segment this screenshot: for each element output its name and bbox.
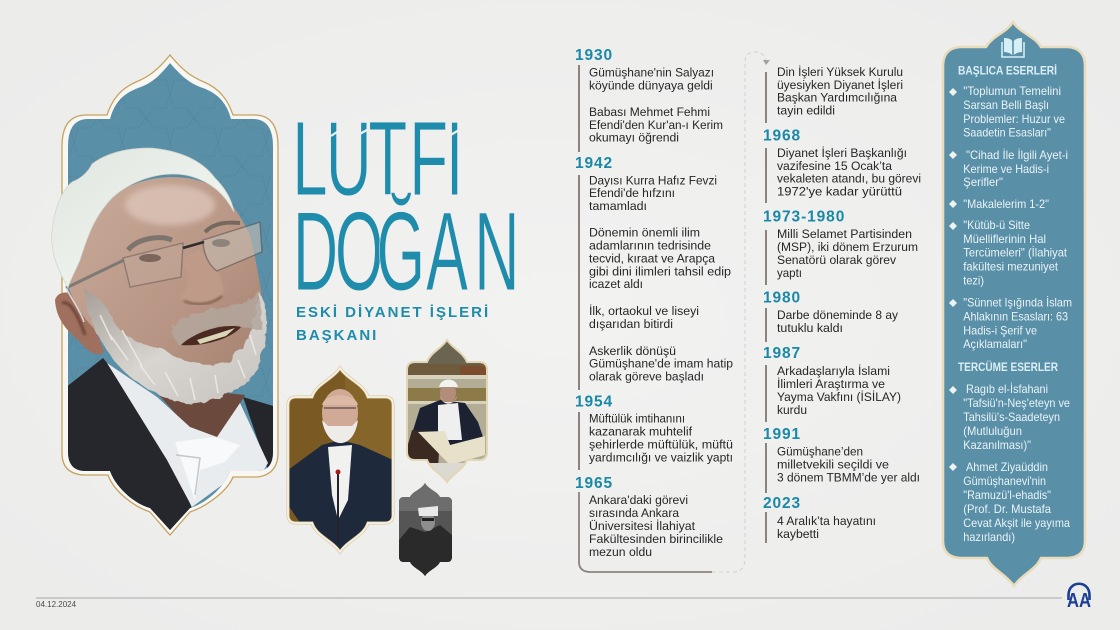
1987: 1987 — [763, 345, 801, 362]
1973-1980: Senatörü olarak görev — [777, 253, 897, 267]
1942: İlk, ortaokul ve liseyi — [589, 304, 699, 318]
footer rule — [36, 598, 1062, 599]
1930: Gümüşhane'nin Salyazı — [589, 66, 714, 80]
1991: milletvekili seçildi ve — [777, 458, 889, 472]
1965: sırasında Ankara — [589, 506, 679, 520]
1965 continued — [777, 65, 903, 118]
1965: Fakültesinden birincilikle — [589, 532, 723, 546]
subtitle: BAŞKANI — [296, 327, 378, 344]
list: main works: "Sünnet Işığında İslam — [963, 297, 1072, 310]
name line 1: LÜTFİ — [292, 99, 463, 218]
1942: Gümüşhane'de imam hatip — [589, 357, 733, 371]
1968: Diyanet İşleri Başkanlığı — [777, 146, 907, 160]
1980: tutuklu kaldı — [777, 321, 843, 335]
1954: 1954 — [575, 394, 613, 411]
mouth — [181, 326, 241, 345]
arrow head — [763, 60, 770, 65]
timeline: right column — [763, 65, 921, 543]
list: translations: Kazanılması)" — [963, 439, 1031, 452]
1965: 1965 — [575, 475, 613, 492]
1980: 1980 — [763, 290, 801, 307]
main portrait panel — [62, 55, 278, 535]
face — [68, 177, 265, 400]
1991 — [763, 426, 920, 485]
1942: Dayısı Kurra Hafız Fevzi — [589, 173, 717, 187]
1965 — [575, 475, 723, 559]
1973-1980: yaptı — [777, 266, 802, 280]
white cap — [52, 148, 234, 288]
list: main works: Problemler: Huzur ve — [963, 113, 1065, 126]
moustache — [170, 290, 263, 345]
name line 2: DOĞAN — [293, 190, 520, 315]
1954 — [575, 394, 733, 464]
2023: kaybetti — [777, 527, 819, 541]
subtitle — [296, 304, 490, 344]
list: main works: fakültesi mezuniyet — [963, 261, 1059, 274]
shirt — [107, 363, 268, 507]
1930: 1930 — [575, 47, 613, 64]
1965: mezun oldu — [589, 545, 652, 559]
beard — [84, 288, 267, 404]
bars — [578, 65, 580, 470]
1954: Müftülük imtihanını — [589, 412, 685, 426]
1942: Dönemin önemli ilim — [589, 226, 700, 240]
1968: 1968 — [763, 128, 801, 145]
portrait photo of Lütfi Doğan — [52, 148, 280, 535]
1987: Arkadaşlarıyla İslami — [777, 364, 890, 378]
2023 — [763, 495, 876, 541]
1965 continued: tayin edildi — [777, 104, 835, 118]
nose — [180, 250, 224, 303]
1942: Askerlik dönüşü — [589, 344, 676, 358]
1965 continued: Başkan Yardımcılığına — [777, 91, 897, 105]
1965: Üniversitesi İlahiyat — [589, 519, 696, 533]
1954: kazanarak muhtelif — [589, 425, 693, 439]
footer date: 04.12.2024 — [36, 600, 77, 609]
1987 — [763, 345, 901, 417]
1965 continued: üyesiyken Diyanet İşleri — [777, 78, 903, 92]
photo: reading among bookshelves — [405, 338, 490, 485]
1954: yardımcılığı ve vaizlik yaptı — [589, 450, 733, 464]
list: main works: Açıklamaları" — [963, 338, 1027, 351]
1942: tamamladı — [589, 199, 647, 213]
1942: tecvid, kıraat ve Arapça — [589, 252, 715, 266]
list: main works: Müelliflerinin Hal — [963, 233, 1046, 246]
list: translations: Gümüşhanevi'nin — [963, 475, 1046, 488]
1942: gibi dini ilimleri tahsil edip — [589, 264, 731, 278]
1973-1980: (MSP), iki dönem Erzurum — [777, 240, 918, 254]
1987: Yayma Vakfını (İSİLAY) — [777, 390, 901, 404]
forehead highlight — [125, 185, 215, 225]
ear — [55, 292, 104, 354]
1930: Babası Mehmet Fehmi — [589, 105, 710, 119]
1942: icazet aldı — [589, 277, 643, 291]
1968: vazifesine 15 Ocak’ta — [777, 159, 892, 173]
1930: okumayı öğrendi — [589, 131, 679, 145]
1965 continued: Din İşleri Yüksek Kurulu — [777, 65, 903, 79]
1968: vekaleten atandı, bu görevi — [777, 172, 921, 186]
list: main works: "Cihad İle İlgili Ayet-i — [966, 149, 1068, 162]
1991: Gümüşhane’den — [777, 445, 863, 459]
list: translations: hazırlandı) — [963, 531, 1015, 544]
1930: Efendi'den Kur'an-ı Kerim — [589, 118, 723, 132]
1987: kurdu — [777, 403, 807, 417]
arch pattern — [70, 79, 270, 530]
list: translations: "Tafsiü'n-Neş'eteyn ve — [963, 397, 1070, 410]
1980 — [763, 290, 899, 335]
list: main works: Hadis-i Şerif ve — [963, 325, 1037, 338]
heading: main works: BAŞLICA ESERLERİ — [958, 64, 1057, 78]
1991: 1991 — [763, 426, 801, 443]
title — [298, 122, 514, 290]
dashed continuation — [712, 52, 766, 572]
beard strokes — [100, 315, 256, 400]
1942 — [575, 155, 733, 384]
1942: dışarıdan bitirdi — [589, 317, 673, 331]
list: translations: "Ramuzü'l-ehadis" — [963, 489, 1051, 502]
photo: speaking at microphone — [285, 365, 397, 555]
1942: adamlarının tedrisinde — [589, 238, 711, 252]
1930: köyünde dünyaya geldi — [589, 78, 713, 92]
1973-1980 — [763, 209, 918, 280]
2023: 4 Aralık’ta hayatını — [777, 514, 876, 528]
glasses — [66, 222, 262, 322]
teal arch background — [68, 63, 273, 530]
1954: şehirlerde müftülük, müftü — [589, 438, 733, 452]
list: main works: "Toplumun Temelini — [963, 85, 1061, 98]
list: main works: "Makalelerim 1-2" — [963, 198, 1049, 211]
1942: Efendi'de hıfzını — [589, 186, 675, 200]
subtitle: ESKİ DİYANET İŞLERİ — [296, 304, 490, 321]
neck — [157, 393, 245, 437]
heading: translations: TERCÜME ESERLER — [958, 361, 1059, 374]
list: translations: Ragıb el-İsfahani — [966, 383, 1048, 396]
jacket — [60, 358, 280, 535]
connector line — [579, 492, 712, 572]
photo: archive black and white — [399, 483, 452, 576]
1987: İlimleri Araştırma ve — [777, 377, 885, 391]
list: translations: (Mutluluğun — [963, 425, 1022, 438]
panel shape — [943, 22, 1085, 586]
panel: works — [943, 22, 1085, 586]
list: main works: Saadetin Esasları" — [963, 127, 1051, 140]
bars — [765, 72, 767, 543]
2023: 2023 — [763, 495, 801, 512]
list: translations — [949, 383, 1071, 544]
list: main works: Şerifler" — [963, 176, 1003, 189]
1980: Darbe döneminde 8 ay — [777, 308, 899, 322]
list: main works: "Kütüb-ü Sitte — [963, 219, 1030, 232]
list: main works: Tercümeleri" (İlahiyat — [963, 247, 1068, 260]
logo: AA: AA — [1067, 590, 1091, 612]
list: main works — [949, 85, 1072, 351]
list: translations: Cevat Akşit ile yayıma — [963, 517, 1071, 530]
1930 — [575, 47, 723, 145]
cuts for integrated dots — [331, 130, 459, 136]
eyes and brows — [128, 223, 240, 262]
timeline: left column — [575, 47, 770, 572]
1942: 1942 — [575, 155, 613, 172]
list: translations: Tahsilü's-Saadeteyn — [963, 411, 1060, 424]
1942: olarak göreve başladı — [589, 370, 704, 384]
logo: AA — [1067, 584, 1091, 612]
1973-1980: Milli Selamet Partisinden — [777, 227, 912, 241]
1968 — [763, 128, 921, 198]
list: main works: Ahlakının Esasları: 63 — [963, 311, 1068, 324]
icon: open book — [1002, 38, 1024, 57]
1991: 3 dönem TBMM’de yer aldı — [777, 471, 920, 485]
list: main works: tezi) — [963, 275, 984, 288]
list: main works: Sarsan Belli Başlı — [963, 99, 1049, 112]
1968: 1972'ye kadar yürüttü — [777, 184, 902, 198]
list: translations: (Prof. Dr. Mustafa — [963, 503, 1052, 516]
list: translations: Ahmet Ziyaüddin — [966, 461, 1048, 474]
1973-1980: 1973-1980 — [763, 209, 845, 226]
list: main works: Kerime ve Hadis-i — [963, 163, 1049, 176]
1965: Ankara'daki görevi — [589, 493, 688, 507]
